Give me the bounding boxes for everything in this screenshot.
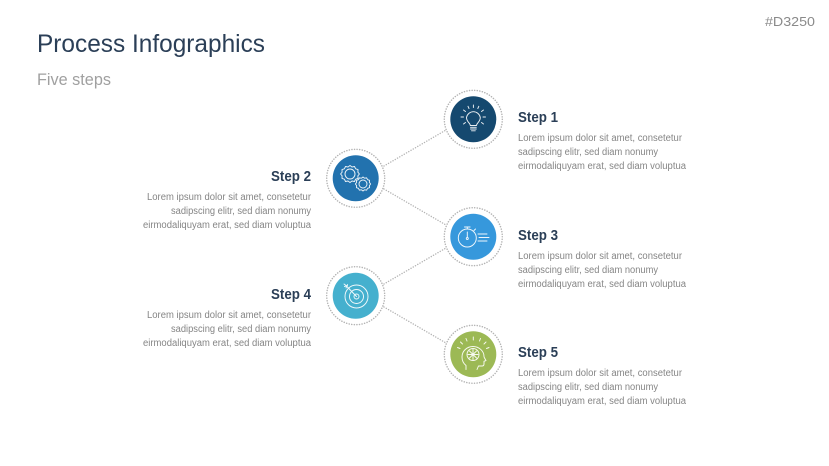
step 1 node [444,90,502,148]
step 4 text: Step 4 [271,287,311,303]
icon: light bulb [461,105,486,131]
step 2 text: sadipscing elitr, sed diam nonumy [171,206,311,217]
step 4 node [327,267,385,325]
step 3 text: Step 3 [518,228,558,244]
step 3 text: eirmodaliquyam erat, sed diam voluptua [518,279,686,290]
step 4 text [143,287,312,349]
step 3 text: Lorem ipsum dolor sit amet, consetetur [518,251,683,262]
step 2 text: eirmodaliquyam erat, sed diam voluptua [143,220,311,231]
icon: gears [341,166,371,191]
step 5 text: eirmodaliquyam erat, sed diam voluptua [518,396,686,407]
step 3 text [518,228,686,290]
step 3 node [444,208,502,266]
step 2 text [143,169,312,231]
step 1 text: eirmodaliquyam erat, sed diam voluptua [518,161,686,172]
step 4 text: eirmodaliquyam erat, sed diam voluptua [143,338,311,349]
icon: target [344,284,368,308]
icon: stopwatch [458,227,489,247]
step 5 text: Step 5 [518,345,558,361]
step 5 node [444,325,502,383]
step 1 text [518,110,686,172]
step 5 text: Lorem ipsum dolor sit amet, consetetur [518,368,683,379]
step 1 text: sadipscing elitr, sed diam nonumy [518,147,658,158]
step 5 text [518,345,686,407]
step 1 text: Lorem ipsum dolor sit amet, consetetur [518,133,683,144]
title: Process Infographics [37,30,265,58]
step 5 text: sadipscing elitr, sed diam nonumy [518,382,658,393]
step 2 node [327,149,385,207]
step 2 text: Step 2 [271,169,311,185]
icon: head with brain [458,337,489,370]
step 2 text: Lorem ipsum dolor sit amet, consetetur [147,192,312,203]
connector lines [384,130,446,343]
step 1 text: Step 1 [518,110,558,126]
step 4 text: sadipscing elitr, sed diam nonumy [171,324,311,335]
step 3 text: sadipscing elitr, sed diam nonumy [518,265,658,276]
subtitle: Five steps [37,71,111,89]
slide code: #D3250 [765,14,815,29]
step 4 text: Lorem ipsum dolor sit amet, consetetur [147,310,312,321]
